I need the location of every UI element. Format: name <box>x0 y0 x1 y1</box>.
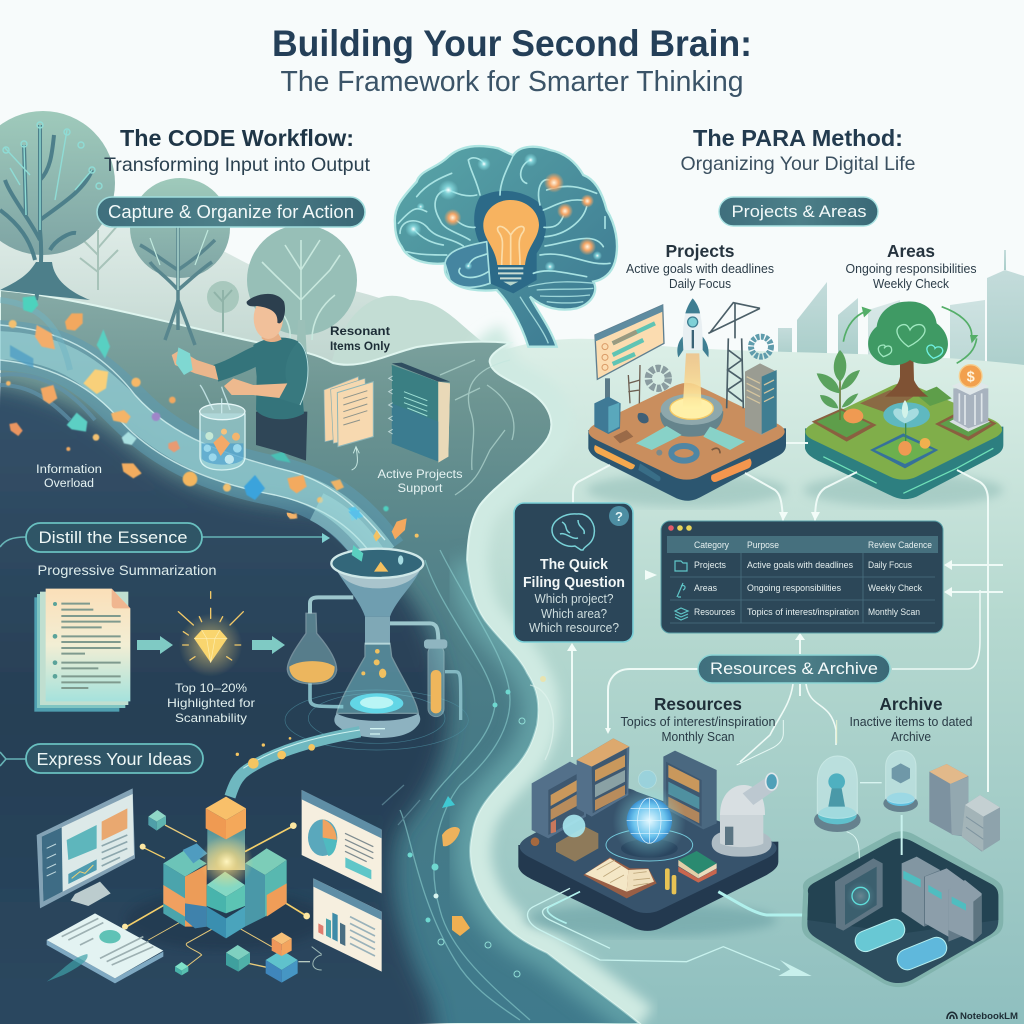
lower flask <box>337 643 418 713</box>
gems in the river <box>6 296 389 521</box>
text: top 10-20 percent: Top 10–20% <box>175 681 247 695</box>
person with jar <box>172 294 308 470</box>
shadows and links <box>127 890 327 950</box>
heading: PARA method <box>680 125 916 175</box>
text: information overload: Information <box>36 464 102 476</box>
notes <box>324 377 361 442</box>
cabinets <box>929 764 1000 852</box>
table: PARA summary: Active goals with deadlines <box>747 560 853 570</box>
text: resonant items only <box>330 326 391 353</box>
table: PARA summary: Review Cadence <box>868 540 932 550</box>
card: quick filing question: The Quick <box>540 557 609 573</box>
monitor <box>71 882 111 906</box>
text: active projects support: Active Projects <box>378 467 462 481</box>
text: archive: Archive <box>880 694 943 714</box>
text: areas: Ongoing responsibilities <box>846 262 976 276</box>
capsules <box>852 916 950 973</box>
pill: resources and archive: Resources & Archive <box>710 660 878 678</box>
arm extended <box>213 345 267 382</box>
heading: CODE workflow <box>104 125 371 176</box>
gears <box>648 337 771 461</box>
recycling arrows <box>843 307 977 363</box>
bell jars <box>814 751 918 832</box>
text: resources: Topics of interest/inspiration <box>620 715 776 729</box>
launch pad <box>660 403 723 437</box>
bookcases <box>532 738 717 838</box>
icon: brain outline <box>552 514 594 550</box>
pumpkins <box>843 409 863 423</box>
rocket <box>683 298 703 350</box>
pill: distill the essence <box>0 523 330 552</box>
document on floor <box>47 940 163 983</box>
icon: funnel and flasks <box>285 507 468 750</box>
globe <box>606 785 693 861</box>
left flask <box>287 613 337 684</box>
card: quick filing question: Which area? <box>541 607 607 621</box>
text: projects: Active goals with deadlines <box>626 262 774 276</box>
book stack <box>678 851 717 874</box>
decorative road lines <box>382 360 553 1020</box>
table: PARA summary: Category <box>694 540 729 550</box>
big tree <box>885 355 928 397</box>
card: quick filing question: Filing Question <box>523 575 625 591</box>
pill: resources and archive <box>698 655 890 683</box>
city skyline <box>778 250 1024 385</box>
rocket flame <box>683 353 702 408</box>
pill: express your ideas <box>0 744 203 773</box>
small pale tree <box>207 281 239 332</box>
large arrow <box>778 960 812 976</box>
crane <box>708 303 760 408</box>
connector <box>737 720 783 765</box>
pillar building and coin <box>949 412 990 432</box>
pie panel <box>302 790 382 893</box>
held crystal <box>176 347 193 375</box>
icon: projects island <box>587 298 787 507</box>
table: PARA summary: Areas <box>694 583 717 593</box>
text: resources: Monthly Scan <box>662 730 735 744</box>
test tubes <box>665 868 670 890</box>
pill: capture and organize: Capture & Organize for Action <box>108 202 354 222</box>
telescope <box>712 773 778 857</box>
text: top 10-20 percent <box>167 681 255 725</box>
icon: curated notes and notebook <box>324 363 450 470</box>
icon: brain with light bulb <box>395 146 617 347</box>
icon: areas island: $ <box>967 369 975 385</box>
text: areas: Areas <box>887 241 935 261</box>
icon: resources island <box>518 720 827 976</box>
server racks <box>902 857 982 942</box>
heading: PARA method: Organizing Your Digital Life <box>680 153 916 175</box>
arrow heads <box>567 512 952 734</box>
text: projects: Projects <box>666 241 735 261</box>
table: PARA summary: Daily Focus <box>868 560 912 570</box>
icon: document stack <box>34 589 130 712</box>
title <box>272 23 752 98</box>
table: PARA summary: Projects <box>694 560 726 570</box>
table: PARA summary: Resources <box>694 607 735 617</box>
text: progressive summarization: Progressive Summarization <box>38 563 216 578</box>
title: The Framework for Smarter Thinking <box>280 66 744 98</box>
text: archive <box>850 694 973 744</box>
garden beds <box>812 408 877 442</box>
left puzzle cubes <box>163 850 207 877</box>
pill: express your ideas: Express Your Ideas <box>36 749 192 769</box>
table: PARA summary <box>661 521 943 633</box>
base rings <box>285 690 468 750</box>
pill: capture and organize <box>97 197 365 227</box>
icon: areas island <box>803 301 1003 507</box>
icon: glowing diamond <box>178 592 243 677</box>
text: archive: Inactive items to dated <box>850 715 973 729</box>
heading: CODE workflow: The CODE Workflow: <box>120 125 354 151</box>
text: archive: Archive <box>891 730 931 744</box>
table: PARA summary: Ongoing responsibilities <box>747 583 841 593</box>
connector lines <box>572 443 1003 792</box>
pale band hugging the road edge <box>467 343 640 1024</box>
middle circuit tree <box>130 178 230 345</box>
funnel <box>365 617 390 643</box>
sapling <box>837 360 842 420</box>
pill: projects and areas: Projects & Areas <box>732 202 866 221</box>
misty hills behind the trees <box>0 170 460 420</box>
text: top 10-20 percent: Scannability <box>175 711 247 725</box>
board <box>605 378 610 407</box>
icon: table row icons <box>675 561 688 620</box>
jar <box>200 385 245 470</box>
text: areas: Weekly Check <box>873 277 950 291</box>
pale bush <box>330 296 520 380</box>
light beam <box>207 828 245 870</box>
text: projects <box>626 241 774 291</box>
incoming stream <box>317 507 373 560</box>
pit <box>802 831 1003 987</box>
right land <box>300 339 1024 1024</box>
bar chart panel <box>313 878 382 972</box>
arrow: document to gem <box>137 636 173 654</box>
left circuit tree <box>0 111 115 300</box>
centre cube <box>207 872 245 897</box>
torso <box>253 338 308 419</box>
logo: NotebookLM: NotebookLM <box>960 1011 1018 1022</box>
desk <box>556 827 598 862</box>
tower <box>745 363 777 435</box>
test tube <box>428 645 444 717</box>
table: PARA summary: Topics of interest/inspiration <box>747 607 859 617</box>
right circuit tree <box>247 225 357 360</box>
text: information overload: Overload <box>44 478 94 490</box>
pipes <box>528 888 820 970</box>
text: projects: Daily Focus <box>669 277 731 291</box>
heading: PARA method: The PARA Method: <box>693 125 903 151</box>
text: resonant items only: Resonant <box>330 326 390 338</box>
text: resources <box>620 694 776 744</box>
card: quick filing question: Which resource? <box>529 621 619 635</box>
table: PARA summary: Purpose <box>747 540 779 550</box>
dark lower field <box>0 380 448 1024</box>
trousers <box>256 412 307 461</box>
title: Building Your Second Brain: <box>272 23 752 64</box>
card: quick filing question: Which project? <box>534 592 614 606</box>
text: resonant items only: Items Only <box>330 341 391 353</box>
far tree left <box>78 225 118 290</box>
pill: distill the essence: Distill the Essence <box>38 528 188 547</box>
icon: archive vault <box>802 720 1003 987</box>
side pipes <box>310 597 353 613</box>
table: PARA summary: Weekly Check <box>868 583 922 593</box>
idea cubes and outputs <box>37 788 382 983</box>
notebook <box>392 367 450 462</box>
stream from flask to cubes <box>230 730 360 797</box>
open book <box>583 857 657 898</box>
small cubes <box>148 810 166 822</box>
table: PARA summary: Monthly Scan <box>868 607 920 617</box>
heading: CODE workflow: Transforming Input into Output <box>104 154 371 176</box>
second arm <box>278 342 308 405</box>
card: quick filing question <box>514 503 633 642</box>
control box <box>594 397 621 434</box>
icon: question badge: ? <box>615 509 623 524</box>
orange top cube <box>206 797 246 820</box>
river of information <box>0 300 385 555</box>
pill: projects and areas <box>719 197 878 226</box>
text: information overload <box>36 464 102 490</box>
falling gems <box>392 518 407 539</box>
drifting gems along the road <box>408 676 546 977</box>
ladder <box>628 365 640 403</box>
text: top 10-20 percent: Highlighted for <box>167 696 255 710</box>
text: resources: Resources <box>654 694 742 714</box>
text: areas <box>846 241 976 291</box>
text: active projects support: Support <box>398 481 443 495</box>
left hill <box>0 290 640 1024</box>
head and neck <box>262 333 282 342</box>
teal glow along the road <box>467 560 640 1024</box>
right puzzle cubes <box>245 848 287 875</box>
text: active projects support <box>378 467 462 495</box>
arrow: gem to funnel <box>252 636 285 654</box>
